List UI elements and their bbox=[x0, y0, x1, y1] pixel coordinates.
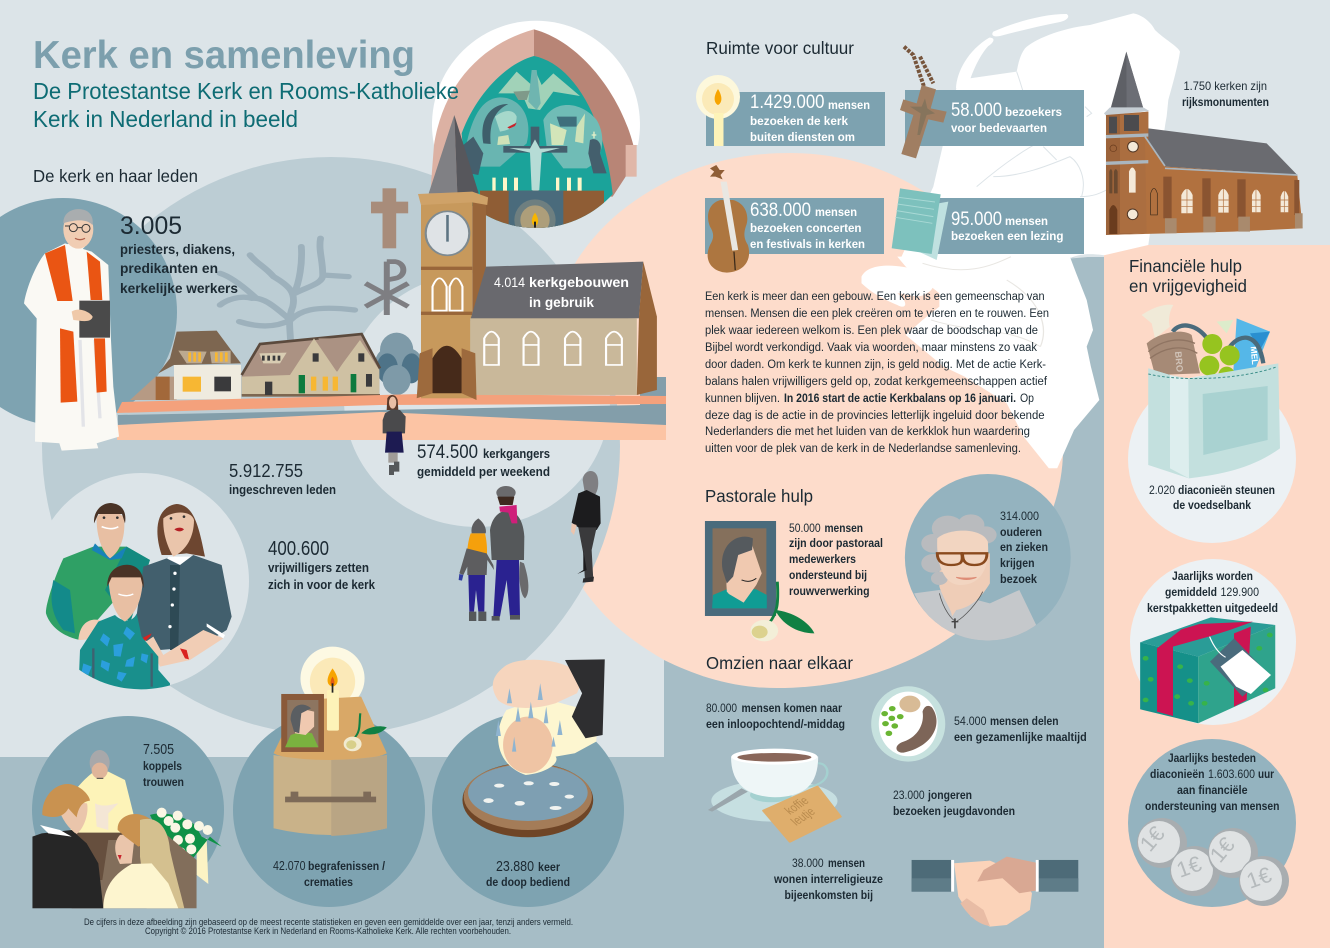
illustration: portrait with flower bbox=[705, 521, 814, 641]
illustration: woman on road bbox=[383, 395, 406, 475]
panel: 1.429.000 visitors: bezoeken de kerk bbox=[750, 114, 848, 128]
stat: baptisms: de doop bediend bbox=[486, 875, 570, 889]
panel: financial support bbox=[1128, 739, 1296, 907]
panel: 58.000 pilgrims bbox=[905, 90, 1084, 146]
stat: funerals: 42.070 bbox=[273, 858, 306, 873]
icon: euro coins: 1€ bbox=[1173, 851, 1205, 883]
stat: funerals: begrafenissen / bbox=[308, 859, 386, 873]
stat: church buildings: 4.014 bbox=[494, 274, 525, 290]
stat: volunteers: zich in voor de kerk bbox=[268, 577, 376, 592]
panel: christmas packages: Jaarlijks worden bbox=[1172, 569, 1253, 583]
panel: 95.000 lecture visitors: mensen bbox=[1005, 214, 1048, 228]
icon: violin bbox=[708, 165, 749, 273]
icon: candle bbox=[696, 75, 740, 146]
circle: funeral background bbox=[233, 713, 425, 907]
panel: 1.429.000 visitors: buiten diensten om bbox=[750, 130, 855, 144]
stat: shared meals: mensen delen bbox=[990, 714, 1058, 728]
stat: drop-in bbox=[706, 701, 845, 731]
stat: mourning support: mensen bbox=[824, 521, 863, 535]
stat: churchgoers: gemiddeld per weekend bbox=[417, 464, 550, 479]
panel: financial support: diaconieën bbox=[1150, 767, 1204, 781]
illustration: priest bbox=[24, 209, 119, 451]
stat: drop-in: mensen komen naar bbox=[742, 701, 842, 715]
text block: intro paragraph: plek waar iedereen welkom is. Een plek waar de boodschap van de bbox=[705, 325, 1038, 337]
footer note: De cijfers in deze afbeelding zijn gebaseerd op de meest recente statistieken en geven een gemiddelde over een jaar, tenzij anders vermeld. bbox=[84, 917, 573, 927]
text block: intro paragraph: In 2016 start de actie Kerkbalans op 16 januari. bbox=[784, 393, 1016, 405]
text block: intro paragraph: Een kerk is meer dan een gebouw. Een kerk is een gemeenschap van bbox=[705, 291, 1045, 303]
illustration: gift box bbox=[1140, 617, 1275, 723]
road bbox=[117, 377, 666, 440]
subtitle: De Protestantse Kerk en Rooms-Katholieke bbox=[33, 78, 459, 104]
stat: drop-in: 80.000 bbox=[706, 701, 737, 715]
stat: church buildings: in gebruik bbox=[529, 294, 594, 310]
illustration: village church bbox=[417, 115, 657, 400]
circle: priest background bbox=[0, 198, 177, 426]
circle: members background bbox=[42, 157, 620, 735]
icon: notebook bbox=[892, 188, 948, 260]
panel: 638.000 concert visitors: bezoeken concerten bbox=[750, 221, 862, 235]
illustration: handshake bbox=[912, 857, 1078, 927]
panel: 1.429.000 visitors bbox=[696, 75, 885, 146]
stat: youth evenings bbox=[893, 788, 1015, 818]
panel: 638.000 concert visitors: mensen bbox=[815, 205, 857, 219]
panel: food bank bbox=[1128, 305, 1296, 543]
footer note bbox=[84, 917, 573, 936]
stat: elderly visits: bezoek bbox=[1000, 572, 1037, 586]
text block: intro paragraph: kunnen blijven. bbox=[705, 393, 780, 405]
stat: volunteers: vrijwilligers zetten bbox=[268, 560, 369, 575]
panel: food bank: 2.020 bbox=[1149, 483, 1175, 497]
heading: pastorale hulp: Pastorale hulp bbox=[705, 486, 813, 506]
illustration: family bbox=[46, 503, 232, 693]
heading: de kerk en haar leden: De kerk en haar leden bbox=[33, 166, 198, 186]
illustration: trees behind houses bbox=[375, 333, 422, 395]
circle: churchgoers background bbox=[344, 273, 610, 527]
illustration: monument church bbox=[1104, 52, 1303, 235]
panel: elderly visits bbox=[905, 474, 1071, 643]
title: Kerk en samenleving bbox=[33, 34, 415, 77]
panel: 95.000 lecture visitors bbox=[937, 198, 1084, 254]
stat: interfaith meetings: bijeenkomsten bij bbox=[784, 888, 873, 902]
panel: 95.000 lecture visitors: bezoeken een lezing bbox=[951, 229, 1064, 243]
illustration: coffee and biscuit bbox=[708, 749, 840, 842]
stat: church buildings bbox=[494, 274, 629, 310]
heading: omzien naar elkaar: Omzien naar elkaar bbox=[706, 653, 853, 673]
illustration: church window mural bbox=[430, 21, 640, 241]
illustration: shopping bag bbox=[1142, 305, 1280, 478]
panel: financial support: Jaarlijks besteden bbox=[1168, 751, 1256, 765]
heading: ruimte voor cultuur: Ruimte voor cultuur bbox=[706, 38, 854, 58]
illustration: shopping bag: BRO bbox=[1173, 351, 1185, 372]
illustration: farm house bbox=[242, 334, 380, 397]
illustration: wedding bbox=[32, 750, 222, 908]
stat: weddings: koppels bbox=[143, 759, 182, 773]
stat: weddings bbox=[143, 741, 184, 789]
stat: volunteers bbox=[268, 538, 376, 592]
stat: priests bbox=[120, 212, 238, 296]
stat: mourning support: ondersteund bij bbox=[789, 568, 867, 582]
stat: drop-in: een inloopochtend/-middag bbox=[706, 717, 845, 731]
icon: wooden cross bbox=[371, 188, 408, 248]
stat: interfaith meetings: 38.000 bbox=[792, 856, 824, 870]
stat: youth evenings: bezoeken jeugdavonden bbox=[893, 804, 1015, 818]
stat: church buildings: kerkgebouwen bbox=[529, 274, 629, 290]
stat: monuments: 1.750 kerken zijn bbox=[1184, 79, 1267, 93]
stat: elderly visits: krijgen bbox=[1000, 556, 1034, 570]
stat: monuments bbox=[1182, 79, 1269, 109]
panel: financial support: aan financiële bbox=[1177, 783, 1248, 797]
stat: funerals: crematies bbox=[304, 875, 353, 889]
panel: 1.429.000 visitors: 1.429.000 bbox=[750, 92, 824, 113]
circle: baptism background bbox=[432, 713, 624, 907]
text block: intro paragraph: Nederlanders die met het luiden van de kerkklok hun waardering bbox=[705, 426, 1030, 438]
stat: mourning support: rouwverwerking bbox=[789, 584, 870, 598]
stat: weddings: trouwen bbox=[143, 775, 184, 789]
panel: 638.000 concert visitors: en festivals in kerken bbox=[750, 237, 865, 251]
stat: churchgoers: kerkgangers bbox=[483, 446, 550, 461]
panel: 1.429.000 visitors: mensen bbox=[828, 98, 870, 112]
icon: euro coins: 1€ bbox=[1243, 862, 1275, 894]
text block: intro paragraph: Bijbel wordt verkondigd. Vaak via woorden, maar minstens zo vaak bbox=[705, 342, 1037, 354]
stat: funerals bbox=[273, 858, 386, 889]
panel: financial support: uur bbox=[1258, 767, 1274, 781]
panel: 58.000 pilgrims: voor bedevaarten bbox=[951, 121, 1047, 135]
illustration: shopping bag: MEL bbox=[1249, 346, 1260, 366]
subtitle: Kerk in Nederland in beeld bbox=[33, 106, 298, 132]
stat: registered members bbox=[229, 461, 336, 497]
stat: mourning support: zijn door pastoraal bbox=[789, 536, 883, 550]
illustration: left house bbox=[130, 331, 241, 400]
panel: 638.000 concert visitors bbox=[705, 198, 884, 254]
panel: christmas packages bbox=[1130, 559, 1296, 725]
stat: monuments: rijksmonumenten bbox=[1182, 95, 1269, 109]
stat: shared meals: een gezamenlijke maaltijd bbox=[954, 730, 1087, 744]
text block: intro paragraph: balans halen vrijwilligers geld op, zodat kerkgemeenschappen actief bbox=[705, 376, 1048, 388]
text block: intro paragraph: mensen. Mensen die een plek creëren om te vieren en te rouwen. Een bbox=[705, 308, 1049, 320]
stat: elderly visits: ouderen bbox=[1000, 525, 1042, 539]
text block: intro paragraph: deze dag is de actie in de provincies letterlijk ingeluid door bekende bbox=[705, 410, 1045, 422]
stat: baptisms: keer bbox=[538, 860, 560, 874]
text block: intro paragraph: uitten voor de plek van de kerk in de Nederlandse samenleving. bbox=[705, 443, 1021, 455]
illustration: coffee and biscuit: leutje bbox=[788, 805, 818, 828]
stat: mourning support bbox=[789, 521, 883, 598]
panel: 95.000 lecture visitors: 95.000 bbox=[951, 209, 1002, 230]
panel: christmas packages: gemiddeld bbox=[1165, 585, 1217, 599]
stat: churchgoers bbox=[417, 442, 550, 479]
map: southern provinces bbox=[862, 257, 1099, 468]
panel: christmas packages: kerstpakketten uitgedeeld bbox=[1147, 601, 1278, 615]
stat: elderly visits bbox=[1000, 509, 1048, 586]
stat: elderly visits: en zieken bbox=[1000, 540, 1048, 554]
icon: chi-rho bbox=[365, 262, 408, 315]
panel: christmas packages: 129.900 bbox=[1220, 585, 1259, 599]
stat: mourning support: medewerkers bbox=[789, 552, 856, 566]
panel: 58.000 pilgrims: bezoekers bbox=[1005, 105, 1062, 119]
stat: priests: priesters, diakens, bbox=[120, 241, 235, 257]
stat: priests: 3.005 bbox=[120, 212, 182, 240]
stat: priests: predikanten en bbox=[120, 260, 218, 276]
panel: 638.000 concert visitors: 638.000 bbox=[750, 200, 811, 221]
panel: food bank: de voedselbank bbox=[1173, 498, 1251, 512]
stat: baptisms: 23.880 bbox=[496, 858, 534, 875]
stat: interfaith meetings: mensen bbox=[828, 856, 865, 870]
stat: churchgoers: 574.500 bbox=[417, 442, 478, 463]
text block: intro paragraph bbox=[705, 291, 1049, 455]
subtitle bbox=[33, 78, 459, 132]
stat: youth evenings: jongeren bbox=[927, 788, 972, 802]
icon: euro coins: 1€ bbox=[1205, 832, 1240, 867]
illustration: baptism bbox=[462, 659, 605, 837]
stat: mourning support: 50.000 bbox=[789, 521, 821, 535]
panel: financial support: ondersteuning van mensen bbox=[1145, 799, 1280, 813]
stat: shared meals: 54.000 bbox=[954, 714, 987, 728]
heading: financiële hulp: Financiële hulp bbox=[1129, 256, 1242, 276]
stat: registered members: ingeschreven leden bbox=[229, 482, 336, 497]
panel: food bank: diaconieën steunen bbox=[1178, 483, 1275, 497]
illustration: parent and child bbox=[459, 486, 528, 621]
heading: financiële hulp bbox=[1129, 256, 1247, 296]
stat: volunteers: 400.600 bbox=[268, 538, 329, 560]
heading: financiële hulp: en vrijgevigheid bbox=[1129, 276, 1247, 296]
text block: intro paragraph: door daden. Om kerk te kunnen zijn, is geld nodig. Met de actie Kerk- bbox=[705, 359, 1046, 371]
stat: shared meals bbox=[954, 714, 1087, 744]
stat: priests: kerkelijke werkers bbox=[120, 280, 238, 296]
icon: meal plate bbox=[871, 686, 945, 762]
illustration: coffin with candle bbox=[274, 647, 387, 836]
circle: family background bbox=[33, 473, 249, 689]
illustration: coffee and biscuit: koffie bbox=[782, 794, 812, 817]
stat: registered members: 5.912.755 bbox=[229, 461, 303, 481]
panel: 58.000 pilgrims: 58.000 bbox=[951, 100, 1002, 121]
stat: interfaith meetings: wonen interreligieuze bbox=[773, 872, 883, 886]
stat: baptisms bbox=[486, 858, 570, 889]
panel: financial support: 1.603.600 bbox=[1208, 767, 1255, 781]
illustration: bare tree bbox=[220, 238, 355, 345]
text block: intro paragraph: Op bbox=[1020, 393, 1034, 405]
illustration: woman with grey hair bbox=[571, 471, 601, 583]
stat: youth evenings: 23.000 bbox=[893, 788, 925, 802]
icon: euro coins: 1€ bbox=[1135, 821, 1170, 856]
stat: elderly visits: 314.000 bbox=[1000, 509, 1039, 523]
stat: interfaith meetings bbox=[773, 856, 883, 902]
map of the Netherlands bbox=[900, 13, 1180, 333]
footer note: Copyright © 2016 Protestantse Kerk in Nederland en Rooms-Katholieke Kerk. Alle rechten voorbehouden. bbox=[145, 926, 511, 936]
icon: euro coins bbox=[1135, 818, 1289, 906]
stat: weddings: 7.505 bbox=[143, 741, 174, 758]
icon: rosary cross bbox=[900, 47, 947, 158]
circle: wedding background bbox=[32, 716, 224, 904]
